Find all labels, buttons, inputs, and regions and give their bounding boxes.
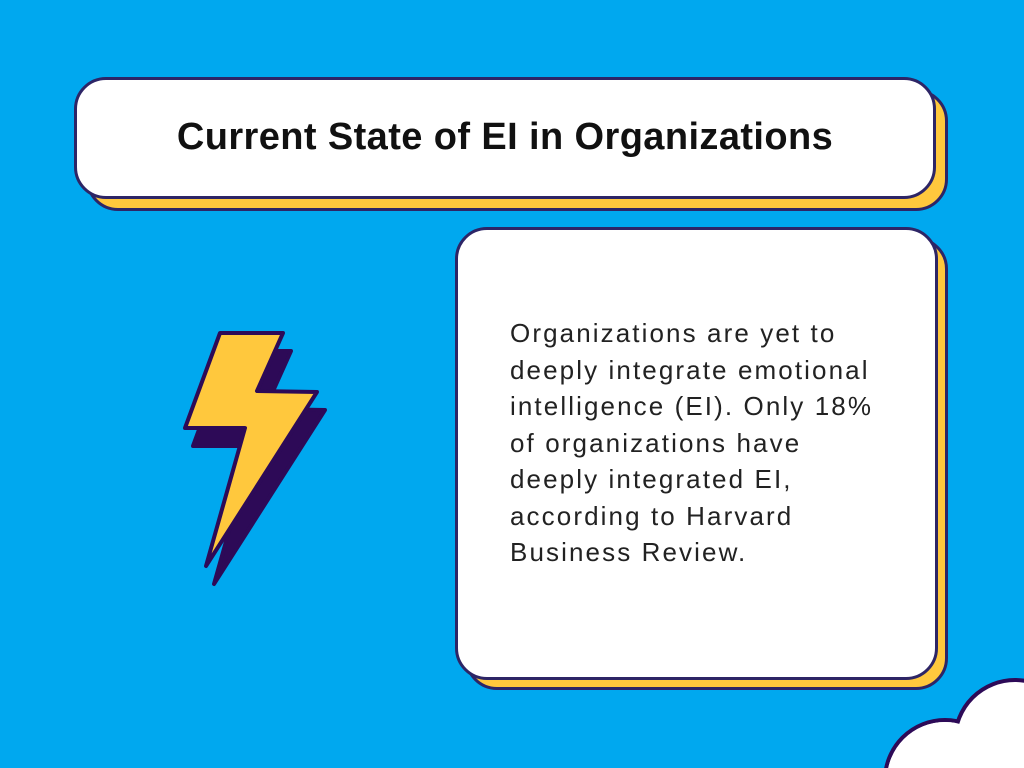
body text: deeply integrated EI, bbox=[510, 464, 793, 494]
body text: deeply integrate emotional bbox=[510, 354, 870, 384]
title: Current State of EI in Organizations bbox=[177, 116, 833, 158]
panel: text bbox=[455, 227, 948, 690]
body text bbox=[510, 318, 873, 567]
icon: cloud bbox=[884, 678, 1024, 768]
title panel bbox=[74, 77, 948, 211]
body text: of organizations have bbox=[510, 428, 801, 458]
body text: intelligence (EI). Only 18% bbox=[510, 391, 873, 421]
body text: Business Review. bbox=[510, 537, 747, 567]
body text: Organizations are yet to bbox=[510, 318, 836, 348]
body text: according to Harvard bbox=[510, 500, 793, 530]
